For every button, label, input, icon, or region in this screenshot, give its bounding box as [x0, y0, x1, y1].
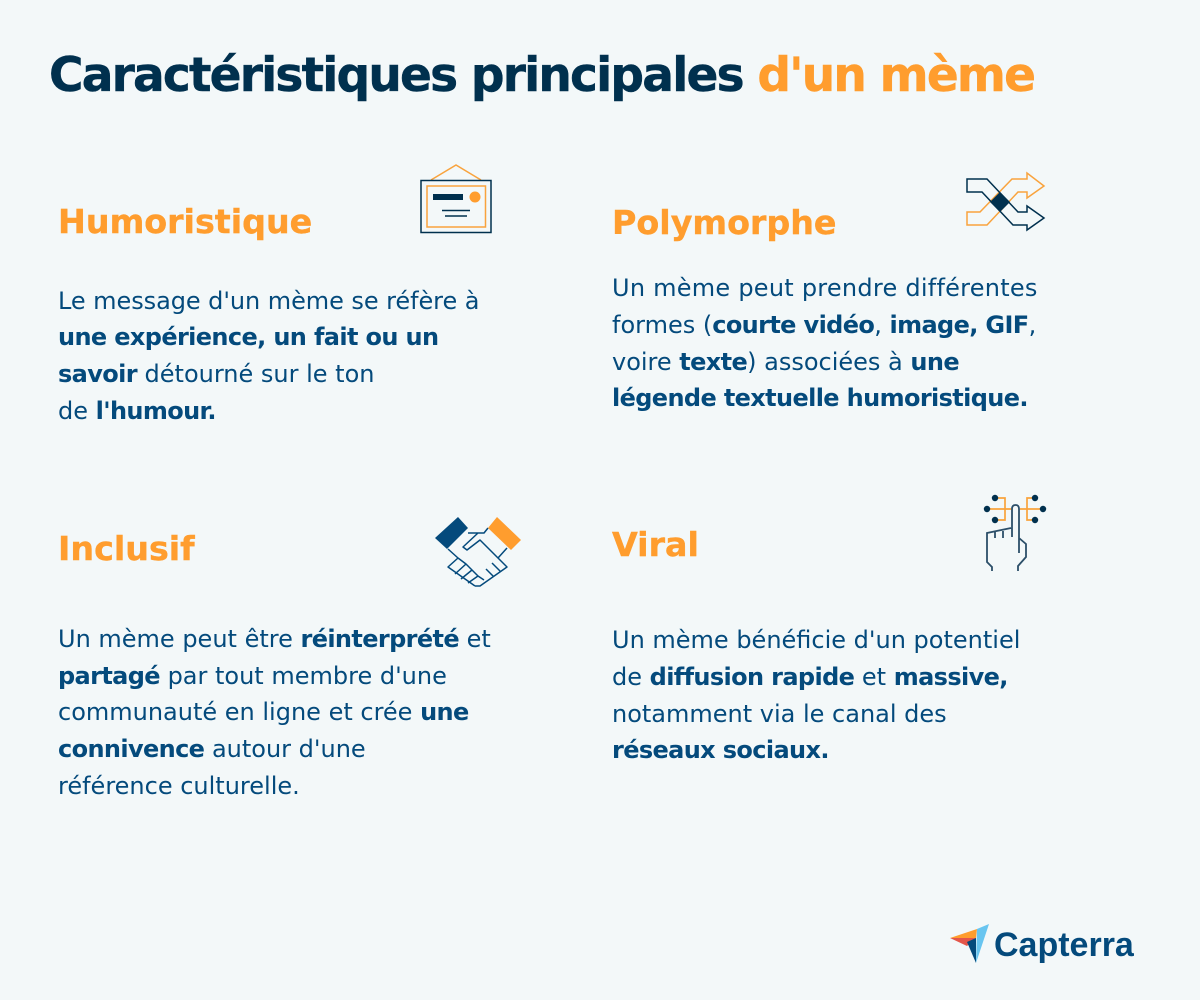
body text: Humoristique: une expérience, un fait ou un [58, 323, 438, 351]
wordmark: Capterra [994, 926, 1134, 964]
body text: Viral: notamment via le canal des [612, 700, 947, 728]
panel: Humoristique [58, 164, 492, 425]
icon: Capterra arrow [950, 924, 989, 963]
logo: Capterra [950, 924, 1134, 964]
body text: Humoristique: savoir détourné sur le ton [58, 360, 374, 388]
icon: finger touching network [984, 494, 1046, 571]
panel: Polymorphe [612, 172, 1046, 412]
body text: Humoristique: de l'humour. [58, 397, 216, 425]
body text: Polymorphe [612, 274, 1038, 412]
icon: crossing arrows [966, 172, 1046, 232]
heading: Inclusif: Inclusif [58, 529, 195, 568]
body text: Polymorphe: voire texte) associées à une [612, 348, 959, 376]
body text: Inclusif: Un mème peut être réinterprété et [58, 625, 491, 653]
body text: Viral: Un mème bénéficie d'un potentiel [612, 626, 1020, 654]
heading: Viral: Viral [612, 525, 699, 564]
body text: Inclusif: connivence autour d'une [58, 735, 366, 763]
heading: Polymorphe: Polymorphe [612, 203, 837, 242]
body text: Polymorphe: formes (courte vidéo, image, GIF, [612, 311, 1036, 339]
body text: Viral: réseaux sociaux. [612, 736, 829, 764]
body text: Inclusif: référence culturelle. [58, 772, 300, 800]
body text: Polymorphe: légende textuelle humoristique. [612, 384, 1028, 412]
heading: Humoristique: Humoristique [58, 202, 312, 241]
body text: Viral: de diffusion rapide et massive, [612, 663, 1008, 691]
body text: Inclusif: partagé par tout membre d'une [58, 662, 447, 690]
panel: Viral [612, 494, 1046, 764]
body text: Polymorphe: Un mème peut prendre différentes [612, 274, 1038, 302]
body text: Inclusif: communauté en ligne et crée une [58, 698, 469, 726]
title: Caractéristiques principales d'un mème [49, 48, 1034, 103]
body text: Humoristique [58, 287, 479, 425]
icon: framed sign [420, 164, 492, 234]
body text: Humoristique: Le message d'un mème se réfère à [58, 287, 479, 315]
panel: Inclusif [58, 517, 521, 800]
body text: Inclusif [58, 625, 491, 800]
body text: Viral [612, 626, 1020, 764]
icon: handshake [435, 517, 521, 587]
